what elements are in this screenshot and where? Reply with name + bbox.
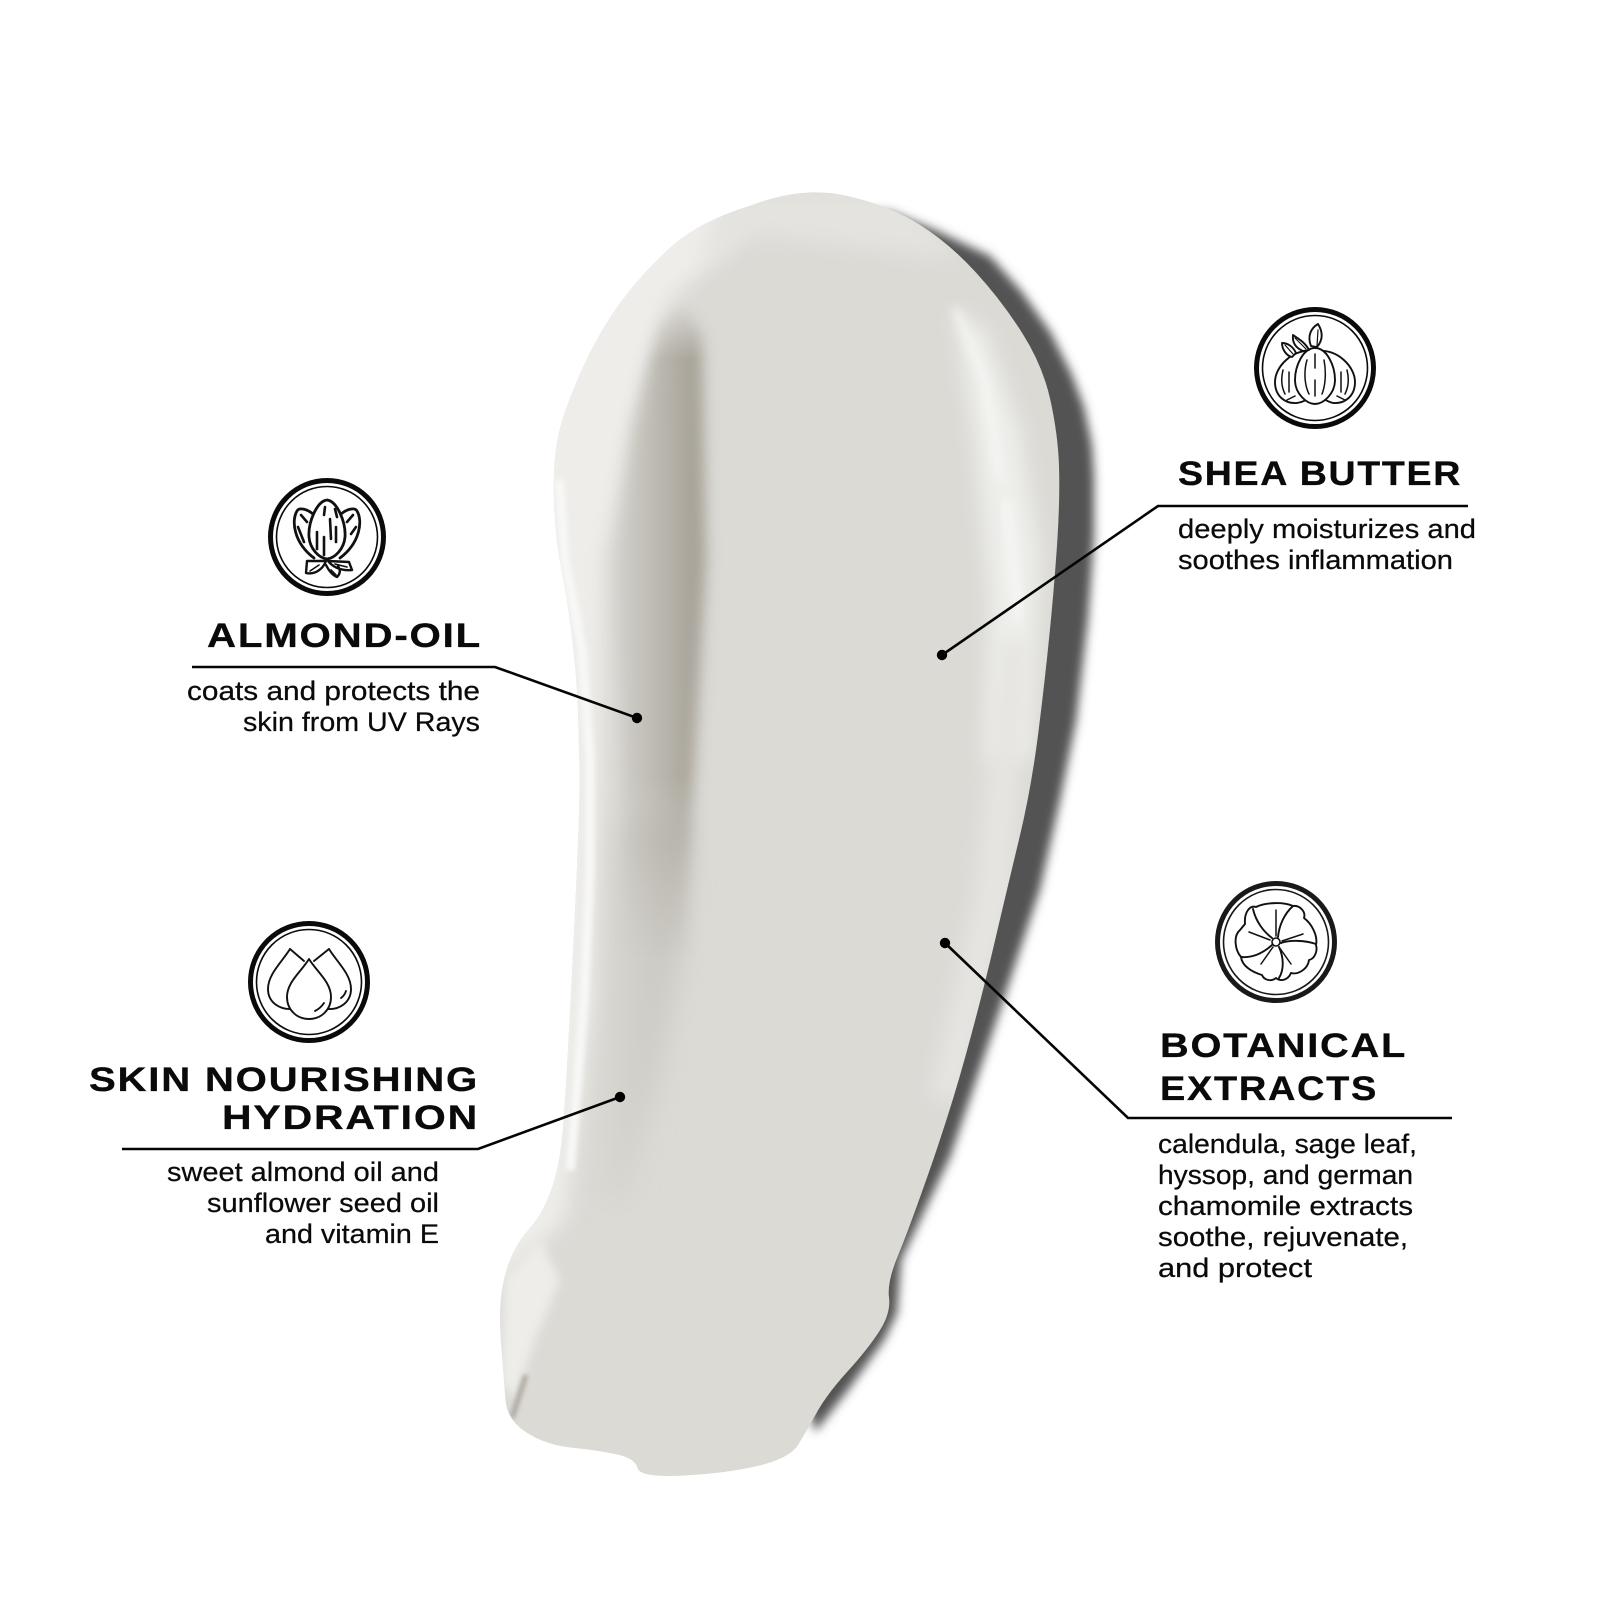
heading: skin nourishing hydration: SKIN NOURISHING (89, 1061, 479, 1099)
description: botanical extracts: soothe, rejuvenate, (1158, 1222, 1408, 1252)
cream swatch (480, 190, 1094, 1476)
heading: skin nourishing hydration: HYDRATION (222, 1099, 479, 1137)
description: shea butter: soothes inflammation (1178, 545, 1453, 575)
cream body (500, 192, 1059, 1476)
description: skin nourishing hydration: sweet almond oil and (167, 1157, 439, 1187)
icon: three drops (250, 924, 368, 1040)
description: botanical extracts: and protect (1158, 1253, 1313, 1283)
callout: skin nourishing hydration (89, 924, 625, 1249)
heading: almond oil: ALMOND-OIL (207, 617, 482, 655)
icon: flower (1218, 884, 1334, 1000)
callout: botanical extracts (940, 884, 1452, 1283)
description: botanical extracts: chamomile extracts (1158, 1191, 1413, 1221)
leader line: shea butter (937, 506, 1468, 660)
description: almond oil: coats and protects the (187, 676, 480, 706)
icon: almonds (270, 480, 384, 594)
description: shea butter (1178, 514, 1476, 575)
description: botanical extracts: calendula, sage leaf, (1158, 1129, 1417, 1159)
leader line: botanical extracts (940, 938, 1452, 1118)
description: skin nourishing hydration: sunflower seed oil (207, 1188, 439, 1218)
callout: shea butter (937, 310, 1476, 660)
leader line: almond oil (192, 667, 642, 723)
heading: botanical extracts: BOTANICAL (1160, 1027, 1407, 1065)
callout: almond oil (187, 480, 642, 737)
heading: skin nourishing hydration (89, 1061, 479, 1137)
heading: botanical extracts: EXTRACTS (1160, 1070, 1378, 1108)
description: shea butter: deeply moisturizes and (1178, 514, 1476, 544)
description: almond oil: skin from UV Rays (243, 707, 480, 737)
description: almond oil (187, 676, 480, 737)
description: skin nourishing hydration: and vitamin E (265, 1219, 439, 1249)
cream drop shadow (700, 210, 1094, 1432)
cream shading (480, 190, 1040, 1418)
description: skin nourishing hydration (167, 1157, 439, 1249)
heading: shea butter: SHEA BUTTER (1178, 455, 1462, 493)
description: botanical extracts: hyssop, and german (1158, 1160, 1413, 1190)
description: botanical extracts (1158, 1129, 1417, 1283)
icon: shea nuts (1256, 310, 1374, 426)
leader line: skin nourishing hydration (122, 1092, 625, 1149)
heading: botanical extracts (1160, 1027, 1407, 1108)
infographic canvas (90, 192, 1474, 1476)
